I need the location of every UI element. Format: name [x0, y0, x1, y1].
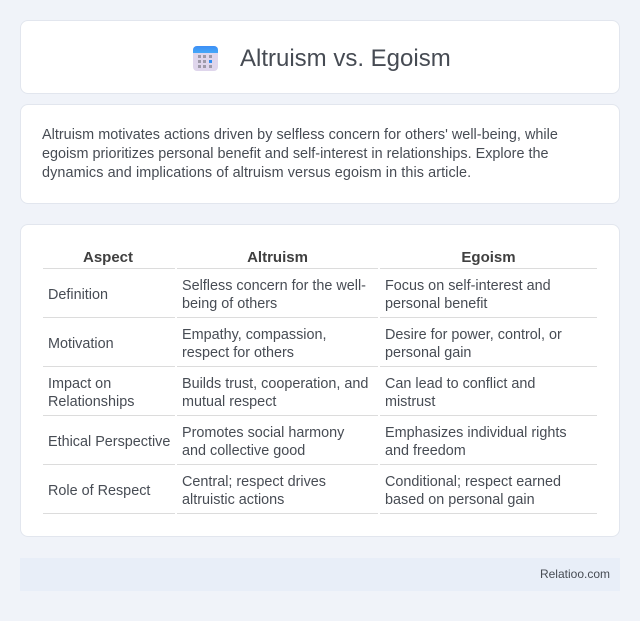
column headers [83, 249, 516, 266]
row: Ethical Perspective [48, 425, 567, 459]
row: Ethical Perspective: Ethical Perspective [48, 434, 170, 450]
intro text: dynamics and implications of altruism versus egoism in this article. [42, 165, 471, 181]
row: Role of Respect: based on personal gain [385, 492, 535, 508]
row: Ethical Perspective: Promotes social harmony [182, 425, 344, 441]
icon: calendar [193, 46, 218, 71]
row: Role of Respect [48, 474, 561, 508]
row: Role of Respect: altruistic actions [182, 492, 284, 508]
column headers: Altruism [247, 249, 308, 266]
row: Definition [48, 278, 551, 312]
row: Motivation: Desire for power, control, or [385, 327, 562, 343]
intro text: egoism prioritizes personal benefit and self-interest in relationships. Explore the [42, 146, 549, 162]
title: Altruism vs. Egoism [240, 45, 451, 72]
row: Definition: Focus on self-interest and [385, 278, 551, 294]
row: Ethical Perspective: Emphasizes individual rights [385, 425, 567, 441]
row: Ethical Perspective: and freedom [385, 443, 466, 459]
column headers: Egoism [461, 249, 516, 266]
footer credit: Relatioo.com [540, 567, 610, 581]
row: Role of Respect: Role of Respect [48, 483, 150, 499]
row: Impact on Relationships: mutual respect [182, 394, 276, 410]
row: Impact on Relationships [48, 376, 535, 410]
row: Impact on Relationships: mistrust [385, 394, 435, 410]
intro text: Altruism motivates actions driven by selfless concern for others' well-being, while [42, 127, 558, 143]
row: Impact on Relationships: Relationships [48, 394, 134, 410]
row: Definition: being of others [182, 296, 277, 312]
row: Impact on Relationships: Builds trust, cooperation, and [182, 376, 368, 392]
row: Motivation: Motivation [48, 336, 114, 352]
row: Role of Respect: Central; respect drives [182, 474, 326, 490]
row: Definition: Definition [48, 287, 108, 303]
row: Motivation: Empathy, compassion, [182, 327, 327, 343]
row: Impact on Relationships: Impact on [48, 376, 111, 392]
row: Motivation: personal gain [385, 345, 471, 361]
row: Role of Respect: Conditional; respect earned [385, 474, 561, 490]
row: Motivation [48, 327, 562, 361]
row: Definition: Selfless concern for the well- [182, 278, 366, 294]
table panel [20, 224, 620, 537]
row: Impact on Relationships: Can lead to conflict and [385, 376, 535, 392]
column headers: Aspect [83, 249, 133, 266]
row: Motivation: respect for others [182, 345, 294, 361]
intro text [42, 127, 558, 181]
header panel [20, 20, 620, 94]
row: Ethical Perspective: and collective good [182, 443, 305, 459]
row: Definition: personal benefit [385, 296, 487, 312]
intro panel [20, 104, 620, 204]
footer bar [20, 558, 620, 591]
